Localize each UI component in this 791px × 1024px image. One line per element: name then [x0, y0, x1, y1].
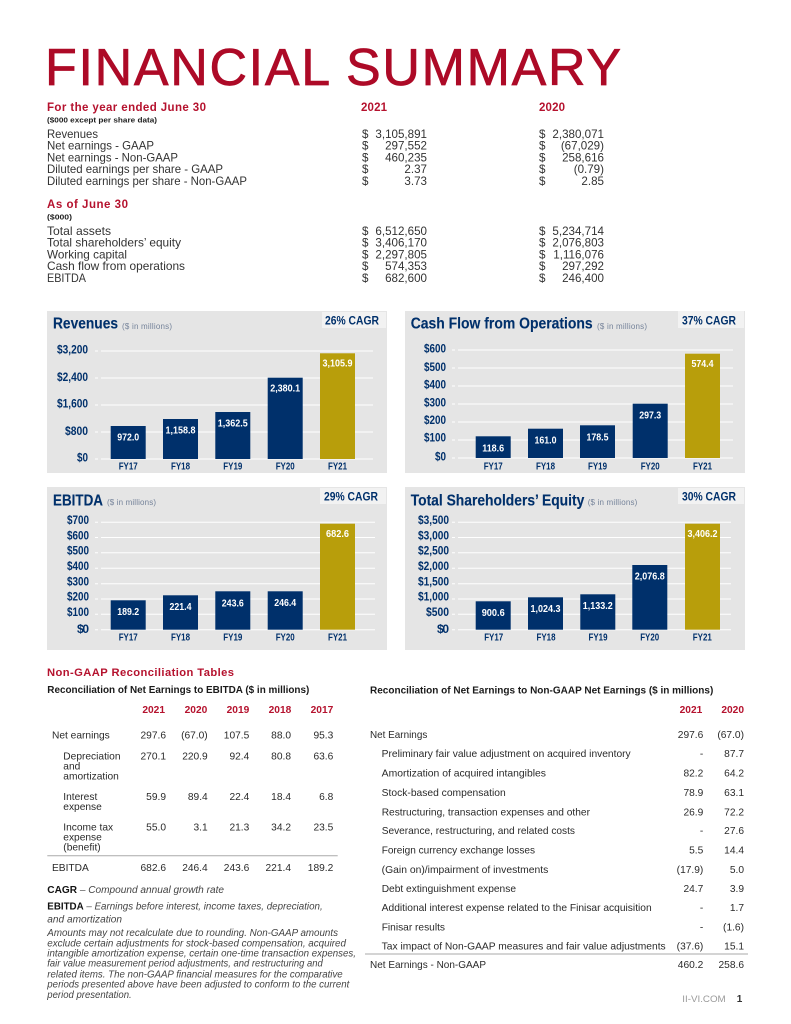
y axis labels: $2,000 — [418, 559, 449, 573]
y axis labels — [424, 341, 446, 463]
2020 values: 15.1 — [724, 942, 744, 953]
row: depreciation and amortization: 92.4 — [229, 751, 250, 762]
x axis labels: FY21 — [328, 462, 347, 473]
bar values — [482, 529, 718, 619]
2021 values: $ — [362, 225, 369, 238]
heading: as of June 30: As of June 30 — [47, 199, 128, 211]
y axis labels: $700 — [67, 513, 89, 527]
y axis labels: $3,000 — [418, 528, 449, 542]
bar values: 1,133.2 — [583, 601, 613, 612]
2021 values: $ — [362, 151, 369, 164]
2021 values — [362, 225, 427, 285]
row: income tax expense: 21.3 — [229, 822, 250, 833]
bar values: 178.5 — [586, 432, 609, 443]
2021 values: 574,353 — [385, 260, 427, 273]
row: EBITDA total — [52, 863, 334, 874]
row: depreciation and amortization: Depreciation — [63, 751, 121, 762]
x axis labels: FY19 — [588, 632, 608, 643]
2021 values: - — [700, 903, 703, 914]
2021 values: 24.7 — [683, 884, 704, 895]
rounding and non-GAAP note: exclude certain adjustments for stock-based compensation, acquired — [47, 938, 347, 949]
row labels: Working capital — [47, 248, 127, 261]
y axis labels: $400 — [424, 378, 446, 392]
row labels: Debt extinguishment expense — [382, 884, 516, 895]
x axis labels — [484, 462, 712, 473]
2021 values: $ — [362, 260, 369, 273]
row: net earnings — [52, 730, 334, 741]
row: income tax expense: Income tax — [63, 822, 113, 833]
2020 values: 1.7 — [730, 903, 744, 914]
row: income tax expense: 3.1 — [194, 822, 208, 833]
y axis labels: $1,000 — [418, 590, 449, 604]
2021 values: 82.2 — [683, 768, 704, 779]
x axis labels: FY18 — [536, 632, 556, 643]
2020 values: $ — [539, 260, 546, 273]
row: net earnings: Net earnings — [52, 730, 110, 741]
2020 values: 258,616 — [562, 151, 604, 164]
2021 values: $ — [362, 140, 369, 153]
bar values: 900.6 — [482, 608, 505, 619]
row labels: Severance, restructuring, and related costs — [382, 826, 575, 837]
CAGR badge: 29% CAGR — [324, 490, 378, 504]
2020 values: $ — [539, 163, 546, 176]
row: interest expense: 6.8 — [319, 792, 334, 803]
panel: revenues chart — [47, 311, 387, 473]
2020 values: 2,380,071 — [552, 128, 604, 141]
row labels: Diluted earnings per share - Non-GAAP — [47, 175, 247, 188]
rounding and non-GAAP note: fair value measurement period adjustments, and restructuring and — [47, 959, 323, 970]
bar values: 1,158.8 — [166, 426, 196, 437]
heading: EBITDA — [53, 492, 103, 510]
unit note: ($ in millions) — [107, 498, 156, 507]
definition: EBITDA: EBITDA – Earnings before interest, income taxes, depreciation, — [47, 902, 323, 913]
2021 values: 78.9 — [683, 788, 704, 799]
y axis labels: $1,500 — [418, 574, 449, 588]
x axis labels: FY17 — [484, 632, 504, 643]
rounding and non-GAAP note — [46, 928, 356, 1001]
2021 values: 2.37 — [404, 163, 427, 176]
row labels: Net earnings - Non-GAAP — [47, 151, 178, 164]
2020 values: (67.0) — [717, 730, 744, 741]
row: interest expense: expense — [63, 802, 102, 813]
2020 values: 2,076,803 — [552, 237, 604, 250]
y axis labels: $100 — [67, 605, 89, 619]
2021 values: 460,235 — [385, 151, 427, 164]
2020 values: 3.9 — [730, 884, 744, 895]
2020 values: 63.1 — [724, 788, 744, 799]
row: net earnings: 297.6 — [140, 730, 166, 741]
footnotes — [46, 885, 356, 1001]
2020 values: 72.2 — [724, 807, 744, 818]
2020 values: (1.6) — [723, 922, 744, 933]
row: income tax expense: expense — [63, 832, 102, 843]
row labels: Additional interest expense related to the Finisar acquisition — [382, 903, 652, 914]
2020 values: 27.6 — [724, 826, 744, 837]
row: EBITDA total: 189.2 — [308, 863, 334, 874]
x axis labels — [119, 632, 347, 643]
x axis labels: FY20 — [276, 462, 295, 473]
x axis labels: FY17 — [119, 632, 138, 643]
row labels: (Gain on)/impairment of investments — [382, 865, 548, 876]
y axis labels: $0 — [77, 450, 88, 464]
units note: ($000) — [47, 212, 73, 222]
row: income tax expense: 34.2 — [271, 822, 291, 833]
y axis labels: $500 — [424, 360, 446, 374]
row labels: Total assets — [47, 225, 111, 238]
row: interest expense: 89.4 — [188, 792, 208, 803]
units note: ($000 except per share data) — [47, 116, 158, 124]
x axis labels: FY21 — [693, 632, 712, 643]
bar values: 1,024.3 — [530, 604, 561, 615]
2021 values: - — [700, 749, 703, 760]
y axis labels: $400 — [67, 559, 89, 573]
row labels: Revenues — [47, 128, 98, 141]
unit note: ($ in millions) — [597, 322, 647, 331]
2021 values: 3,406,170 — [375, 237, 427, 250]
2020 values: 258.6 — [718, 960, 744, 971]
bar values: 2,076.8 — [635, 571, 665, 582]
2020 values: $ — [539, 248, 546, 261]
row: depreciation and amortization: amortization — [63, 772, 119, 783]
2021 values: 2,297,805 — [375, 248, 427, 261]
y axis labels: $1,600 — [57, 396, 88, 410]
row labels — [47, 128, 247, 188]
bar values: 574.4 — [692, 359, 714, 370]
2020 values: 5,234,714 — [552, 225, 605, 238]
bar values — [117, 359, 353, 444]
2020 values: $ — [539, 237, 546, 250]
x axis labels: FY20 — [276, 632, 295, 643]
row: EBITDA total: 243.6 — [224, 863, 250, 874]
year headers: 2019 — [227, 705, 250, 716]
2020 values: $ — [539, 151, 546, 164]
x axis labels: FY20 — [641, 462, 660, 473]
bar values: 682.6 — [326, 529, 349, 540]
2020 values: $ — [539, 175, 546, 188]
bar values: 246.4 — [274, 598, 297, 609]
rounding and non-GAAP note: periods presented above have been adjusted to conform to the current — [46, 980, 351, 991]
bars — [476, 524, 720, 630]
x axis labels: FY18 — [171, 462, 190, 473]
definition: EBITDA — [47, 902, 323, 926]
CAGR badge: 37% CAGR — [682, 313, 736, 327]
2021 values: 297,552 — [385, 140, 427, 153]
row: income tax expense: 23.5 — [313, 822, 334, 833]
y axis labels — [67, 513, 89, 636]
y axis labels: $300 — [67, 574, 89, 588]
2020 values: 14.4 — [724, 846, 744, 857]
rounding and non-GAAP note: period presentation. — [46, 990, 132, 1001]
2021 values: 6,512,650 — [375, 225, 427, 238]
row labels: Restructuring, transaction expenses and other — [382, 807, 591, 818]
row: EBITDA total: EBITDA — [52, 863, 89, 874]
definition: CAGR: CAGR – Compound annual growth rate — [47, 885, 225, 896]
row labels: Total shareholders’ equity — [47, 237, 181, 250]
heading: Revenues — [53, 316, 118, 332]
row labels: Net Earnings - Non-GAAP — [370, 960, 486, 971]
row: interest expense: Interest — [63, 792, 97, 803]
y axis labels: $2,400 — [57, 370, 88, 384]
bar values: 189.2 — [117, 607, 140, 618]
2021 values: 5.5 — [689, 846, 704, 857]
2020 values: 246,400 — [562, 272, 604, 285]
row: net earnings: 107.5 — [224, 730, 250, 741]
2020 values: (0.79) — [574, 163, 604, 176]
year headers: 2021 — [680, 705, 703, 716]
x axis labels: FY18 — [536, 462, 555, 473]
row: net earnings: 88.0 — [271, 730, 291, 741]
row labels — [370, 730, 666, 971]
panel: total shareholders' equity chart — [405, 487, 745, 650]
y axis labels — [57, 343, 88, 464]
x axis labels: FY21 — [328, 632, 347, 643]
rounding and non-GAAP note: intangible amortization expense, certain one-time transaction expenses, — [47, 948, 356, 959]
bar values: 118.6 — [482, 443, 505, 454]
row labels: Amortization of acquired intangibles — [382, 768, 546, 779]
y axis labels: $500 — [67, 544, 89, 558]
row: income tax expense: 55.0 — [146, 822, 166, 833]
row: net earnings: (67.0) — [181, 730, 208, 741]
bar values: 297.3 — [639, 410, 662, 421]
bar values: 161.0 — [534, 436, 557, 447]
y axis labels: $2,500 — [418, 544, 449, 558]
x axis labels: FY17 — [119, 462, 138, 473]
table: net earnings to EBITDA — [47, 685, 338, 874]
2021 values: 26.9 — [683, 807, 704, 818]
y axis labels: $100 — [424, 431, 446, 445]
unit note: ($ in millions) — [588, 498, 638, 507]
row: depreciation and amortization: and — [63, 761, 81, 772]
2021 values: $ — [362, 128, 369, 141]
2021 values: (37.6) — [677, 942, 703, 953]
definition: EBITDA: and amortization — [47, 915, 122, 926]
year headers: 2017 — [311, 705, 334, 716]
x axis labels: FY19 — [588, 462, 607, 473]
2020 values — [717, 730, 744, 971]
row: depreciation and amortization: 270.1 — [140, 751, 166, 762]
y axis labels: $300 — [424, 396, 446, 410]
y axis labels: $500 — [426, 605, 449, 619]
2020 values: 1,116,076 — [553, 248, 604, 261]
y axis labels: $0 — [435, 449, 446, 463]
y axis labels: $200 — [67, 590, 89, 604]
row: interest expense — [63, 792, 334, 813]
y axis labels: $3,200 — [57, 343, 88, 357]
y axis labels: $600 — [67, 528, 89, 542]
2021 values: $ — [362, 163, 369, 176]
2020 values — [539, 128, 604, 188]
2021 values: - — [700, 922, 703, 933]
rounding and non-GAAP note: Amounts may not recalculate due to rounding. Non-GAAP amounts — [46, 928, 338, 939]
year headers: 2021 — [142, 705, 165, 716]
rounding and non-GAAP note: related items. The non-GAAP financial measures for the comparative — [47, 970, 343, 981]
row labels: Net earnings - GAAP — [47, 140, 154, 153]
2020 values: $ — [539, 140, 546, 153]
2021 values: (17.9) — [677, 865, 703, 876]
2020 values — [539, 225, 605, 285]
2021 values: - — [700, 826, 703, 837]
section heading: non-GAAP reconciliation tables: Non-GAAP Reconciliation Tables — [47, 667, 234, 679]
2021 values — [677, 730, 704, 971]
heading: for the year: For the year ended June 30 — [47, 102, 206, 114]
row labels: Stock-based compensation — [382, 788, 506, 799]
x axis labels: FY19 — [223, 462, 243, 473]
heading: Total Shareholders’ Equity — [411, 492, 585, 510]
bar values: 221.4 — [170, 602, 192, 613]
y axis labels: $3,500 — [418, 513, 449, 527]
2021 values: 682,600 — [385, 272, 427, 285]
year headers: 2018 — [269, 705, 292, 716]
row: depreciation and amortization: 220.9 — [182, 751, 208, 762]
footer: site and page number: II-VI.COM — [682, 994, 726, 1005]
2021 values: 297.6 — [678, 730, 704, 741]
2020 values: 297,292 — [562, 260, 604, 273]
footer: site and page number: 1 — [737, 994, 743, 1005]
row: EBITDA total: 682.6 — [140, 863, 166, 874]
2021 values — [362, 128, 427, 188]
row labels: Net Earnings — [370, 730, 427, 741]
x axis labels: FY20 — [640, 632, 660, 643]
y axis labels: $600 — [424, 341, 446, 355]
year header 2020: 2020 — [539, 102, 565, 114]
2021 values: 460.2 — [678, 960, 704, 971]
table heading: Reconciliation of Net Earnings to EBITDA ($ in millions) — [47, 685, 309, 696]
row labels: Cash flow from operations — [47, 260, 185, 273]
x axis labels: FY17 — [484, 462, 503, 473]
row labels: Finisar results — [382, 922, 445, 933]
row: depreciation and amortization: 63.6 — [313, 751, 334, 762]
x axis labels — [119, 462, 347, 473]
2021 values: $ — [362, 272, 369, 285]
row labels: EBITDA — [47, 272, 86, 285]
CAGR badge: 26% CAGR — [325, 313, 379, 327]
bars — [111, 524, 355, 630]
panel: cash flow chart — [405, 311, 745, 473]
row: income tax expense: (benefit) — [63, 843, 101, 854]
row: net earnings: 95.3 — [313, 730, 334, 741]
2021 values: $ — [362, 175, 369, 188]
bar values: 2,380.1 — [270, 384, 301, 395]
2020 values: 87.7 — [724, 749, 744, 760]
2021 values: $ — [362, 237, 369, 250]
year headers — [680, 705, 744, 716]
2020 values: 2.85 — [581, 175, 604, 188]
row labels: Foreign currency exchange losses — [382, 846, 535, 857]
bar values — [117, 529, 349, 618]
year headers — [142, 705, 334, 716]
CAGR badge: 30% CAGR — [682, 490, 736, 504]
year headers: 2020 — [185, 705, 208, 716]
y axis labels: $800 — [65, 424, 88, 438]
2021 values: 3,105,891 — [375, 128, 427, 141]
row: depreciation and amortization — [63, 751, 334, 783]
summary table: for the year ended June 30 — [47, 102, 604, 188]
bar values — [482, 359, 714, 454]
x axis labels: FY21 — [693, 462, 712, 473]
heading: Cash Flow from Operations — [411, 316, 593, 332]
bar values: 972.0 — [117, 433, 140, 444]
2020 values: $ — [539, 128, 546, 141]
summary table: as of June 30 — [47, 199, 605, 285]
2021 values: 3.73 — [404, 175, 427, 188]
y axis labels: $200 — [424, 413, 446, 427]
2021 values: $ — [362, 248, 369, 261]
row: income tax expense — [63, 822, 334, 854]
bar values: 3,406.2 — [688, 529, 718, 540]
table heading: Reconciliation of Net Earnings to Non-GAAP Net Earnings ($ in millions) — [370, 685, 713, 696]
2020 values: 5.0 — [730, 865, 744, 876]
y axis labels: $ 0 — [437, 622, 449, 636]
2020 values: 64.2 — [724, 768, 744, 779]
row: interest expense: 18.4 — [271, 792, 291, 803]
year header 2021: 2021 — [361, 102, 388, 114]
unit note: ($ in millions) — [122, 322, 172, 331]
table: net earnings to non-GAAP net earnings — [365, 685, 748, 971]
x axis labels — [484, 632, 712, 643]
row labels: Tax impact of Non-GAAP measures and fair value adjustments — [382, 942, 666, 953]
row labels — [47, 225, 185, 285]
row: EBITDA total: 221.4 — [266, 863, 291, 874]
row labels: Preliminary fair value adjustment on acquired inventory — [382, 749, 632, 760]
2020 values: $ — [539, 272, 546, 285]
bars — [476, 354, 720, 458]
row: interest expense: 22.4 — [229, 792, 250, 803]
bars — [111, 353, 355, 459]
2020 values: (67,029) — [561, 140, 604, 153]
year headers: 2020 — [721, 705, 744, 716]
row labels: Diluted earnings per share - GAAP — [47, 163, 223, 176]
panel: EBITDA chart — [47, 487, 387, 650]
title: FINANCIAL SUMMARY — [45, 39, 621, 97]
bar values: 243.6 — [222, 598, 244, 609]
row: EBITDA total: 246.4 — [182, 863, 208, 874]
y axis labels — [418, 513, 449, 636]
row: interest expense: 59.9 — [146, 792, 166, 803]
2020 values: $ — [539, 225, 546, 238]
row: depreciation and amortization: 80.8 — [271, 751, 291, 762]
bar values: 3,105.9 — [322, 359, 353, 370]
bar values: 1,362.5 — [218, 419, 248, 430]
y axis labels: $ 0 — [77, 622, 89, 636]
x axis labels: FY19 — [223, 632, 243, 643]
x axis labels: FY18 — [171, 632, 190, 643]
